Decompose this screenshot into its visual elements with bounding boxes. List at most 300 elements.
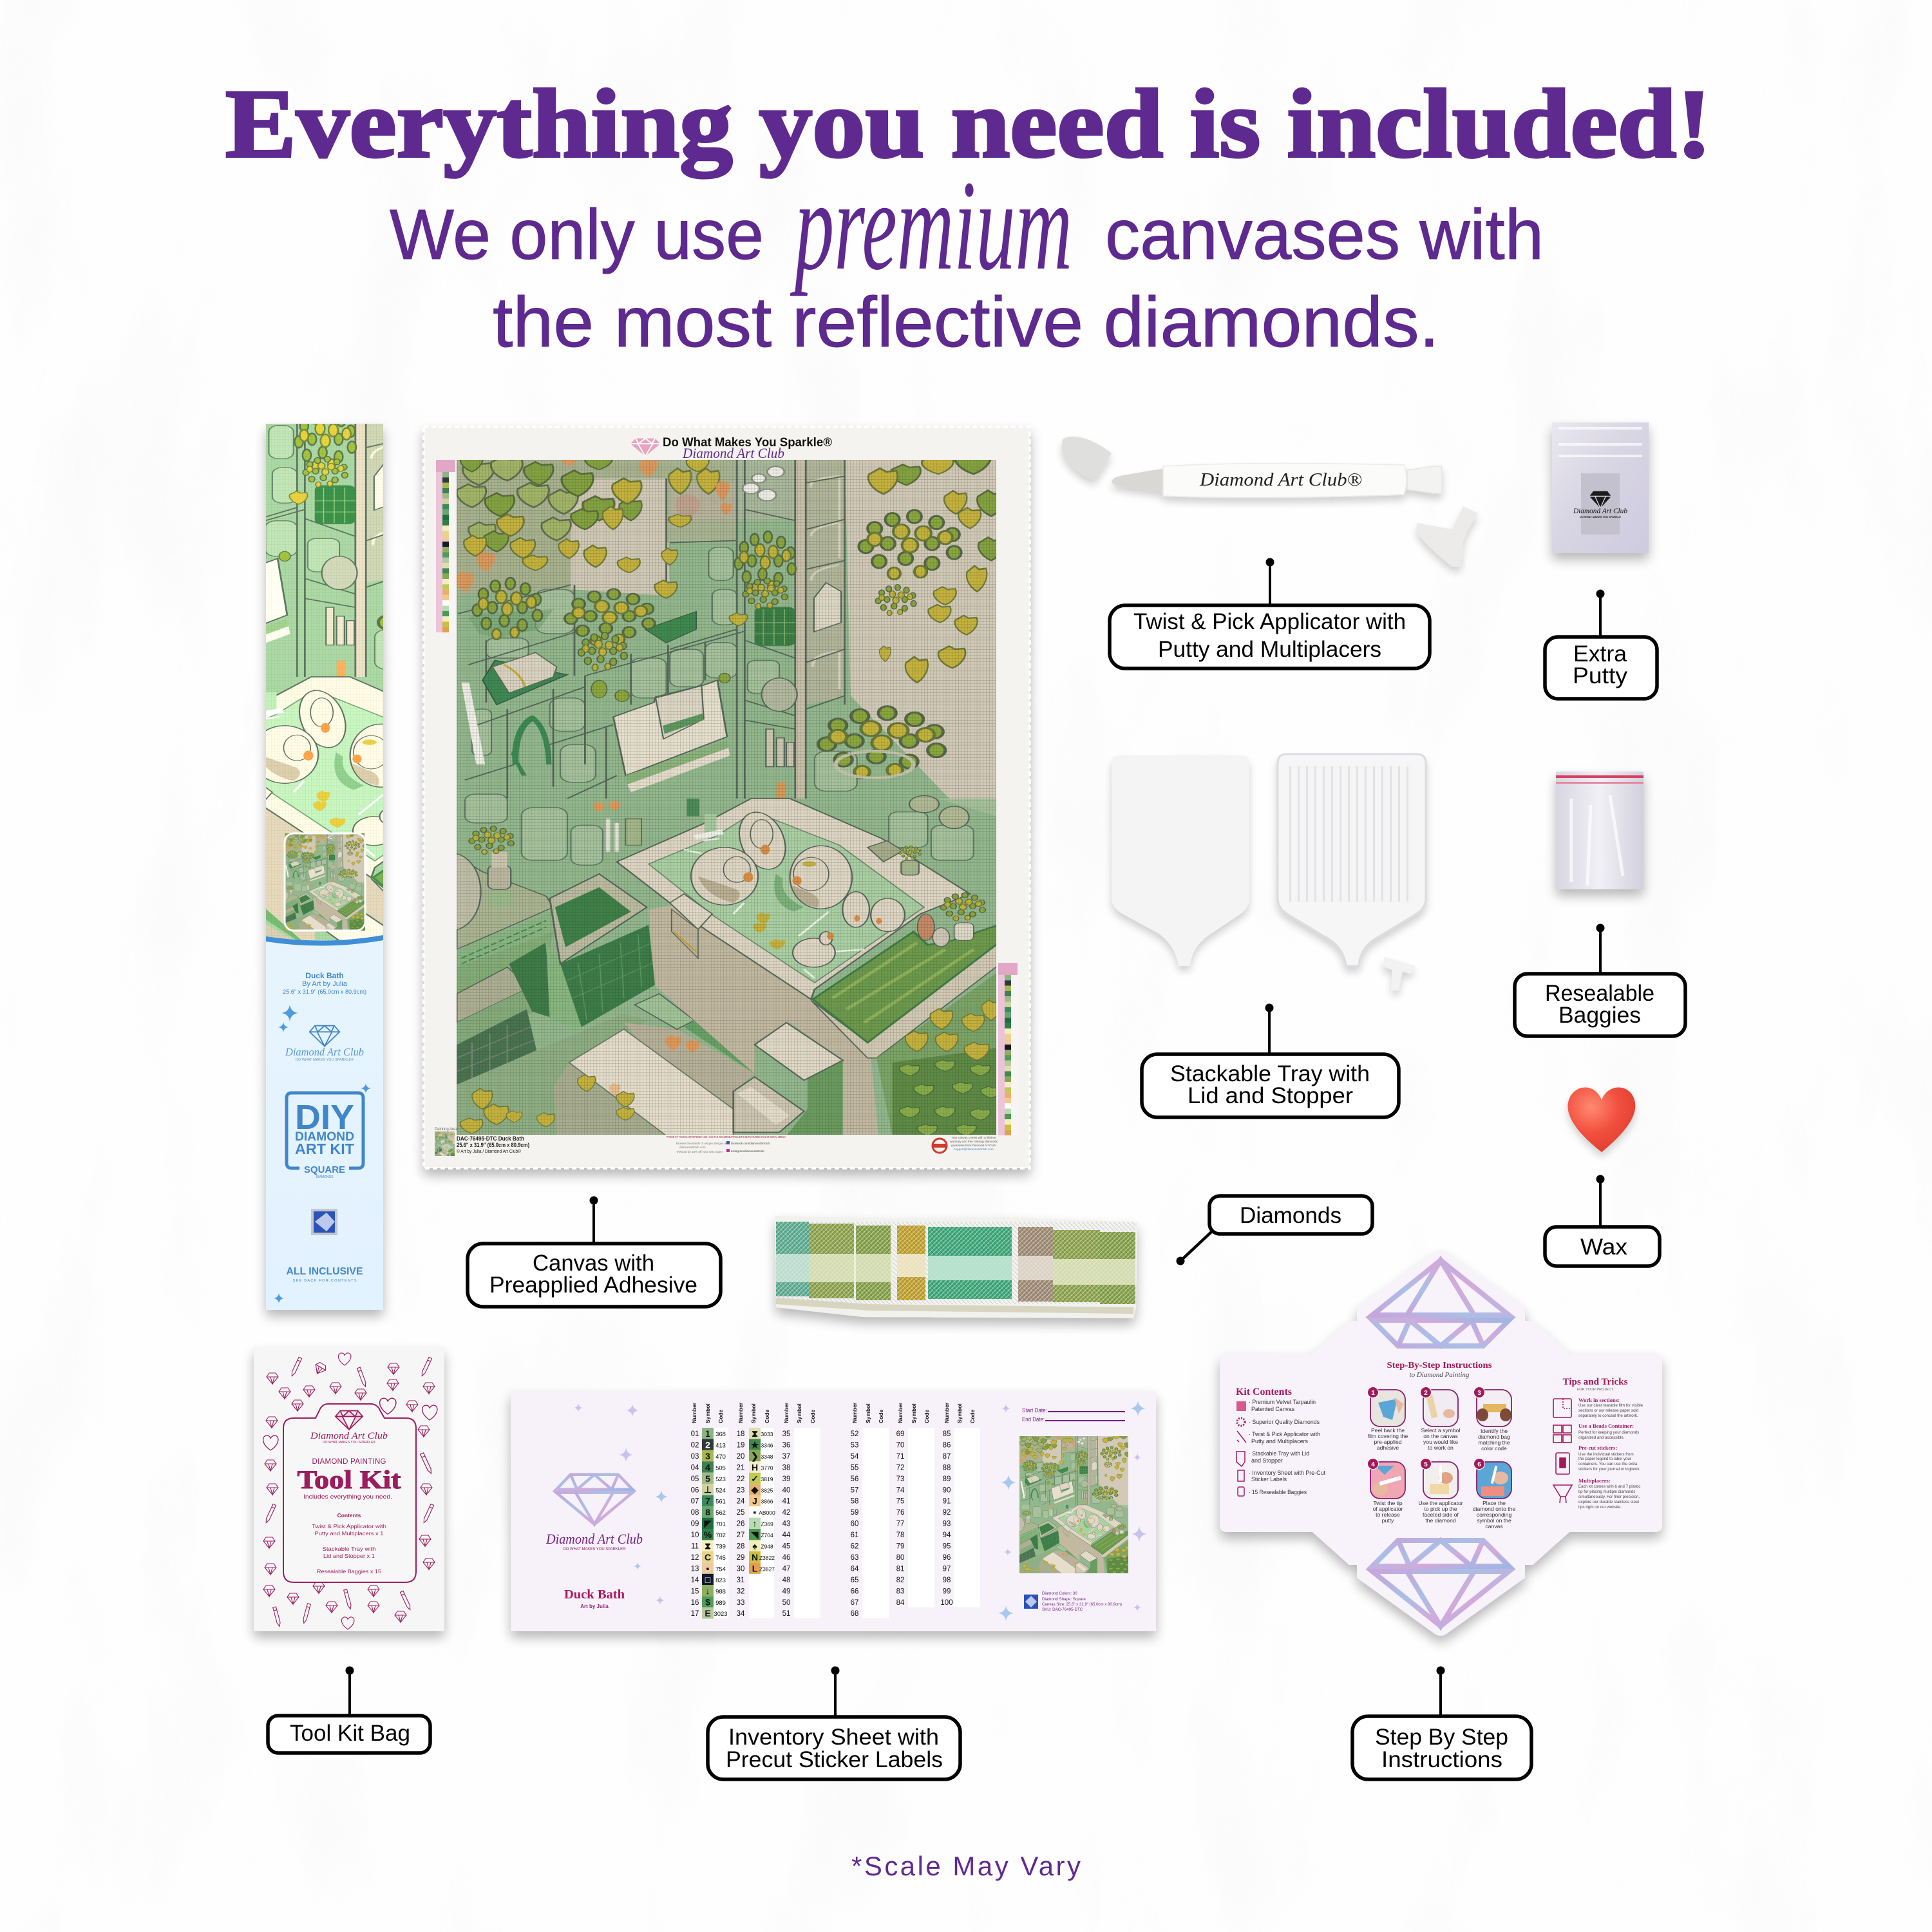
all inclusive: SEE BACK FOR CONTENTS [292,1279,357,1283]
row numbers: 14 [691,1577,699,1584]
label: Extra Putty [1545,637,1657,699]
symbols: L [752,1563,758,1573]
extra putty pack [1552,422,1649,553]
DIY badge: DIAMONDS [316,1175,334,1179]
step captions: corresponding [1477,1511,1511,1518]
kit contents: · Stackable Tray with Lid [1249,1450,1309,1457]
footnote: *Scale May Vary [851,1851,1081,1881]
color codes: 823 [715,1577,726,1584]
row numbers: 56 [851,1475,858,1483]
box wrap: packaging tube [0,327,565,1310]
row numbers: 89 [943,1475,951,1483]
row numbers: 16 [691,1599,699,1607]
label: Inventory Sheet [708,1717,960,1779]
row numbers: 01 [691,1430,699,1438]
step images [1370,1390,1511,1499]
warranty note: Your canvas comes with a lifetime [951,1136,996,1139]
row numbers: 41 [782,1498,790,1506]
row numbers: 27 [737,1531,744,1539]
kit spec: SKU: DAC-76495-DTC [1042,1607,1083,1612]
applicator set [1061,437,1478,567]
all inclusive: ALL INCLUSIVE [286,1266,363,1277]
leader: tray [1265,1003,1274,1054]
start and end date [1022,1407,1125,1423]
step captions: canvas [1485,1523,1503,1530]
label: Canvas: Preapplied Adhesive [489,1273,697,1298]
kit contents: and Stopper [1251,1457,1283,1464]
row numbers: 71 [896,1453,904,1461]
row numbers: 74 [896,1486,905,1494]
symbols: ❯ [751,1451,759,1462]
thumbnail on wrap [285,833,365,931]
tips and tricks: Use the individual stickers from [1578,1452,1634,1457]
step captions: film covering the [1368,1433,1408,1439]
column headers: Code [717,1409,724,1423]
color codes: 524 [715,1487,726,1494]
row numbers: 26 [737,1520,744,1528]
warranty note: guarantee from Diamond Art Club! [951,1144,996,1147]
symbols: 8 [705,1507,710,1517]
canvas footer notes: facebook.com/diamondartclub [731,1142,770,1145]
symbols: ◥ [751,1530,759,1540]
DIY badge: ART KIT [295,1141,354,1157]
column headers: Number [897,1402,904,1423]
row numbers: 86 [943,1441,951,1449]
row numbers: 22 [737,1475,744,1483]
row numbers: 25 [737,1509,744,1517]
column headers: Code [969,1409,976,1423]
stackable tray set [1112,754,1426,990]
row numbers: 03 [691,1453,699,1461]
color codes: 3819 [761,1476,773,1482]
row numbers: 50 [782,1599,790,1607]
color legend right [998,963,1018,1135]
tips and tricks: Use our clear tearable film for visible [1578,1403,1643,1408]
step numbers: 6 [1477,1461,1481,1468]
symbols: J [752,1496,757,1506]
step captions [1368,1427,1515,1530]
warranty note [950,1136,998,1151]
step captions: pre-applied [1374,1439,1402,1445]
step captions: to pick up the [1424,1506,1457,1512]
sparkles [274,1005,371,1303]
inventory logo: Duck Bath [564,1587,625,1602]
step captions: Use the applicator [1418,1500,1463,1506]
row numbers: 57 [851,1486,858,1494]
step 4 [1370,1462,1405,1499]
row numbers: 11 [691,1543,699,1551]
symbols: ★ [751,1439,759,1450]
label: Stackable Tray: Stackable Tray with [1170,1061,1370,1086]
row numbers: 83 [896,1587,904,1595]
row numbers: 43 [782,1520,790,1528]
row numbers: 58 [851,1498,858,1506]
row numbers: 60 [851,1520,858,1528]
tool kit logo [310,1411,388,1444]
row numbers: 09 [691,1520,699,1528]
row numbers: 37 [782,1453,790,1461]
tips and tricks: tips right on our website. [1578,1505,1622,1510]
blue wave band [266,935,383,946]
panel: instruction sheet [1220,1251,1662,1636]
row numbers: 64 [851,1565,859,1573]
kit contents: Patented Canvas [1251,1406,1295,1412]
tips and tricks: the paper legend to label your [1578,1457,1631,1461]
row numbers: 92 [943,1509,951,1517]
color codes: 739 [715,1543,726,1551]
panel: canvas [421,427,1030,1168]
color codes: 562 [715,1510,726,1517]
color codes: 989 [715,1600,726,1607]
row numbers: 07 [691,1498,699,1506]
row numbers: 13 [691,1565,699,1573]
kit contents: · Premium Velvet Tarpaulin [1249,1399,1316,1405]
inventory artwork [1019,1436,1128,1573]
tips and tricks: sections or our release paper sold [1578,1408,1639,1413]
row numbers: 33 [737,1599,744,1607]
tips and tricks: Pre-cut stickers: [1578,1444,1617,1451]
color codes: 3866 [761,1499,773,1505]
symbols: ✓ [751,1473,759,1484]
color codes: Z3827 [759,1566,775,1572]
step number badges [1368,1387,1485,1470]
symbols: ◆ [751,1484,759,1495]
row numbers: 73 [896,1475,904,1483]
leader: putty [1596,590,1605,636]
tool kit logo: Diamond Art Club [310,1431,388,1441]
row numbers: 49 [782,1587,790,1595]
row numbers: 76 [896,1509,904,1517]
leader: canvas [590,1197,598,1243]
column headers: Number [943,1402,950,1423]
row numbers: 46 [782,1554,790,1562]
row numbers: 47 [782,1565,790,1573]
row numbers: 82 [896,1577,904,1584]
color codes: 3023 [714,1611,728,1618]
tool kit text: Twist & Pick Applicator with [312,1523,386,1530]
steps heading [1387,1361,1492,1379]
wrap logo: DO WHAT MAKES YOU SPARKLE® [296,1057,354,1062]
color codes: 3770 [761,1464,773,1471]
row numbers: 28 [737,1543,744,1551]
symbols: % [704,1530,712,1540]
inventory logo: DO WHAT MAKES YOU SPARKLE® [563,1546,626,1551]
kit icons [1236,1401,1246,1496]
tips and tricks: Perfect for keeping your diamonds [1578,1430,1639,1435]
canvas product info: © Art by Julia / Diamond Art Club® [457,1149,522,1154]
column headers: Symbol [705,1403,711,1423]
title: Everything you need is included! [225,70,1712,178]
row numbers: 69 [896,1430,904,1438]
row numbers: 23 [737,1486,744,1494]
leader: instructions [1436,1667,1445,1716]
color codes: 701 [715,1521,726,1528]
step numbers: 4 [1371,1461,1375,1468]
symbols: ↑ [752,1519,757,1529]
leader: inventory [831,1667,840,1716]
step captions: Identify the [1481,1428,1508,1434]
tool kit text: Tool Kit [298,1465,401,1494]
tips and tricks: containers. You can use the extra [1578,1462,1638,1466]
label: Twist & Pick Applicator: Twist & Pick Applicator with [1133,609,1406,634]
row numbers: 75 [896,1498,904,1506]
row numbers: 24 [737,1498,745,1506]
tips and tricks: Multiplacers: [1578,1477,1611,1484]
wrap logo: Diamond Art Club [285,1046,364,1058]
tips and tricks: Tips and Tricks [1562,1377,1628,1387]
canvas footer notes: Browse thousands of unique designs at [676,1142,727,1145]
row numbers: 10 [691,1531,699,1539]
column headers: Code [923,1409,930,1423]
step captions: to release [1376,1511,1400,1518]
symbols: 2 [705,1439,710,1450]
symbol swatches [702,1428,761,1619]
label: Stackable Tray [1142,1054,1399,1117]
row numbers: 61 [851,1531,858,1539]
color codes: 413 [715,1442,726,1449]
tool kit logo: DO WHAT MAKES YOU SPARKLE® [323,1440,375,1444]
row numbers: 93 [943,1520,951,1528]
label: Stackable Tray: Lid and Stopper [1188,1083,1353,1108]
row numbers: 31 [737,1577,744,1584]
column headers: Number [851,1402,858,1423]
column headers: Number [737,1402,744,1423]
color codes: 3825 [761,1487,773,1493]
row numbers: 36 [782,1441,790,1449]
row numbers: 19 [737,1441,744,1449]
color codes: 754 [715,1566,726,1573]
label: Inventory Sheet: Precut Sticker Labels [726,1747,943,1772]
step captions: adhesive [1377,1444,1399,1451]
applicator cap [1061,437,1112,480]
column headers: Code [878,1409,884,1423]
tips and tricks: simultaneously. For finer precision, [1578,1495,1640,1499]
row numbers: 72 [896,1464,904,1472]
start and end date: Start Date: [1022,1407,1047,1414]
symbols: ♠ [752,1540,757,1551]
label: Canvas [468,1244,721,1307]
row numbers: 17 [691,1610,699,1618]
tool kit text: Putty and Multiplacers x 1 [314,1530,384,1537]
step captions: color code [1481,1445,1507,1452]
color codes: Z948 [761,1543,773,1549]
row numbers: 95 [943,1543,951,1551]
row numbers: 77 [896,1520,904,1528]
label: Extra Putty: Putty [1573,663,1628,688]
label: Canvas: Canvas with [533,1251,654,1276]
row numbers: 99 [943,1587,951,1595]
inventory sparkles [574,1401,1147,1621]
script word: premium: premium [790,155,1072,297]
tips and tricks: separately to conceal the artwork. [1578,1414,1638,1418]
label: Step By Step: Step By Step [1375,1725,1508,1750]
column headers: Number [691,1402,697,1423]
label: Twist & Pick Applicator [1110,605,1430,668]
symbols: E [705,1608,711,1618]
row numbers: 79 [896,1543,904,1551]
row numbers: 68 [851,1610,858,1618]
canvas product info [457,1135,529,1154]
subtitle: the most reflective diamonds. [493,283,1439,362]
label: Resealable Baggies [1515,974,1685,1036]
symbols: ◤ [704,1519,712,1529]
resealable baggies [1556,772,1643,889]
column headers [691,1402,976,1423]
DIY badge: SQUARE [304,1164,345,1175]
tip icons [1553,1399,1572,1503]
tool kit text: Lid and Stopper x 1 [323,1553,375,1559]
row numbers: 98 [943,1577,951,1584]
canvas footer notes: PROUD OF YOUR MASTERPIECE? USE HASHTAG #DIAMONDARTCLUB TO BE FEATURED ON OUR SOCIAL MEDIA! [667,1135,786,1139]
tool kit text [298,1458,401,1575]
row numbers: 97 [943,1565,951,1573]
DIY badge: DIY [295,1098,354,1137]
leader: wax [1596,1175,1605,1226]
canvas footer notes: TAKE10 for 10% off your next order! [676,1150,723,1153]
row numbers: 96 [943,1554,951,1562]
step captions: Peel back the [1371,1427,1405,1434]
decorative gems [263,1353,437,1629]
step captions: the diamond [1425,1517,1456,1524]
kit contents: Sticker Labels [1251,1476,1287,1482]
kit spec: Canvas Size: 25.6" x 31.9" (65.0cm x 80.9cm) [1042,1602,1122,1607]
step captions: on the canvas [1423,1433,1458,1439]
step captions: you would like [1423,1439,1458,1445]
warranty note: warranty and free missing diamonds [950,1140,998,1143]
symbols: □ [705,1575,711,1585]
kit contents: · Inventory Sheet with Pre-Cut [1249,1470,1326,1476]
kit contents [1236,1387,1326,1496]
color codes: 561 [715,1499,726,1506]
row numbers: 29 [737,1554,744,1562]
tips and tricks: stickers for your journal or logbook. [1578,1467,1641,1472]
label: Tool Kit Bag [268,1716,430,1753]
row numbers: 63 [851,1554,858,1562]
row numbers: 08 [691,1509,699,1517]
canvas footer notes: instagram/diamondartclub [731,1150,764,1153]
symbols: ⧗ [705,1540,711,1551]
row numbers: 94 [943,1531,951,1539]
color codes [714,1431,775,1618]
row numbers: 34 [737,1610,745,1618]
column headers: Symbol [750,1403,757,1423]
row numbers: 39 [782,1475,790,1483]
painting area thumbnail [433,1128,458,1157]
symbols [704,1428,759,1618]
symbols: C [705,1552,711,1562]
extra putty pack: DO WHAT MAKES YOU SPARKLE [1580,515,1621,518]
all inclusive [286,1266,363,1283]
subtitle: canvases with [1105,195,1544,274]
painting area thumbnail: Painting Area [435,1128,458,1132]
row numbers: 21 [737,1464,744,1472]
guarantee stamp [932,1139,947,1153]
leader: diamonds [1176,1231,1212,1265]
multiplacer tip [1416,506,1478,567]
column headers: Code [810,1409,816,1423]
square diamond icon [311,1209,337,1235]
symbols: 5 [705,1473,710,1484]
step numbers [1371,1390,1481,1468]
row numbers: 02 [691,1441,699,1449]
wrap logo [285,1026,364,1062]
canvas heading: Do What Makes You Sparkle® [663,436,832,450]
tips and tricks: tip for placing multiple diamonds [1578,1490,1635,1494]
step 2 [1423,1390,1458,1426]
color codes: 368 [715,1431,726,1438]
canvas product info: 25.6" x 31.9" (65.0cm x 80.9cm) [457,1142,529,1148]
row numbers: 12 [691,1554,699,1562]
row numbers: 100 [940,1599,953,1607]
row numbers: 40 [782,1486,790,1494]
step 1 [1370,1390,1405,1426]
column headers: Symbol [865,1403,871,1423]
step numbers: 5 [1424,1461,1428,1468]
kit contents: Putty and Multiplacers [1251,1438,1309,1444]
symbols: ↓ [706,1586,710,1596]
DIY badge: DIAMOND [295,1130,354,1144]
tool kit text: Resealable Baggies x 15 [317,1568,381,1575]
step captions: diamond bag [1478,1434,1510,1440]
DIY badge [287,1093,363,1179]
canvas footer notes: diamondartclub.com [679,1146,706,1149]
panel: tool kit bag [254,1347,444,1631]
kit spec: Diamond Colors: 30 [1042,1591,1077,1596]
artwork crop on wrap [266,424,383,940]
canvas artwork [421,448,1005,1146]
symbols: H [752,1462,758,1472]
symbols: 1 [705,1428,710,1439]
row numbers: 84 [896,1599,905,1607]
row numbers: 06 [691,1486,699,1494]
tool kit text: DIAMOND PAINTING [312,1458,386,1466]
color codes: Z3822 [759,1555,775,1561]
step captions: Twist the tip [1373,1500,1403,1506]
symbols: ▪ [706,1563,710,1573]
row numbers: 35 [782,1430,790,1438]
top diamond [1372,1260,1509,1346]
tips and tricks: explore our durable stainless steel [1578,1500,1639,1504]
label: Step By Step [1352,1716,1531,1779]
inventory table [691,1402,980,1619]
panel: inventory sheet [511,1391,1156,1631]
color codes: Z704 [761,1532,773,1539]
inventory logo [545,1475,643,1609]
warranty note: support@diamondartclub.com [954,1148,994,1151]
label: Inventory Sheet: Inventory Sheet with [728,1725,939,1750]
step captions: matching the [1478,1439,1510,1446]
tool kit text: Includes everything you need. [303,1493,392,1501]
kit contents: Kit Contents [1236,1387,1292,1397]
color codes: 3348 [761,1454,773,1460]
tips and tricks: organized and accessible. [1578,1435,1625,1440]
row numbers: 91 [943,1498,951,1506]
label: Step By Step: Instructions [1381,1747,1502,1772]
kit spec: Diamond Shape: Square [1042,1597,1086,1602]
start and end date: End Date: [1022,1416,1045,1423]
kit contents: · Superior Quality Diamonds [1249,1419,1320,1425]
color codes: 3346 [761,1442,773,1448]
color codes: 470 [715,1454,726,1461]
row numbers: 55 [851,1464,858,1472]
step 3 [1477,1390,1511,1426]
row numbers: 04 [691,1464,699,1472]
row numbers: 87 [943,1453,951,1461]
label: Wax: Wax [1580,1235,1628,1260]
wrap product text: 25.6" x 31.9" (65.0cm x 80.9cm) [283,989,366,996]
wax heart [1567,1087,1635,1152]
canvas heading [630,436,832,461]
